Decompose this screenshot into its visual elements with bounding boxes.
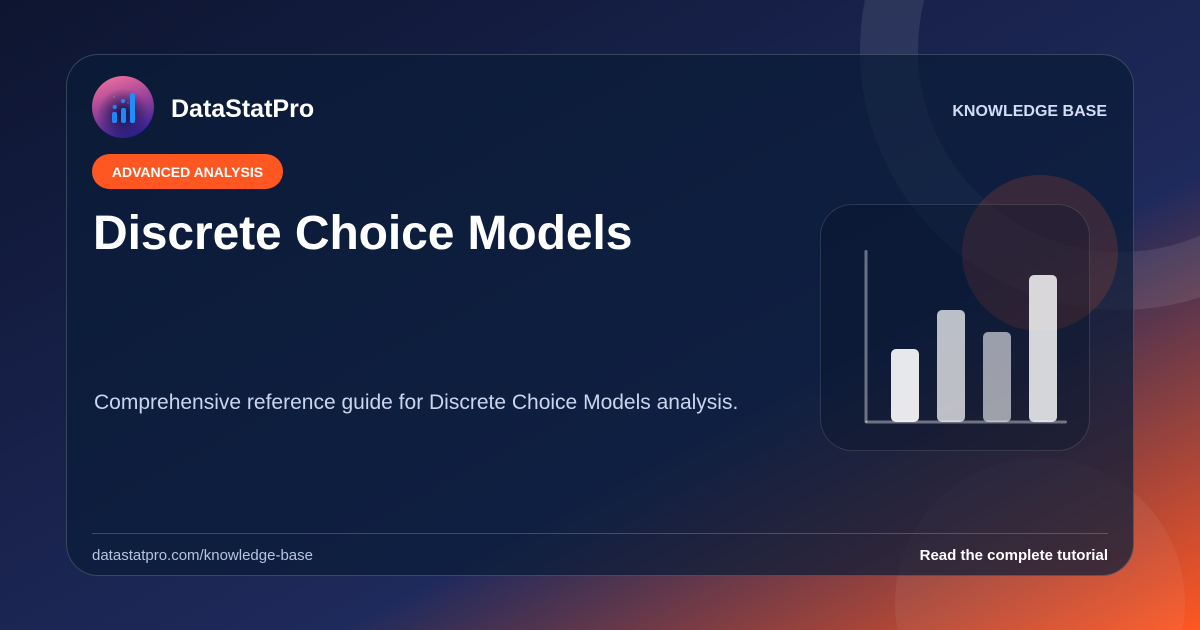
- decorative ring top right: [889, 0, 1200, 281]
- bar chart: [864, 250, 1067, 424]
- footer divider: [92, 533, 1108, 534]
- category pill: [92, 154, 283, 189]
- category pill: ADVANCED ANALYSIS: [112, 164, 263, 180]
- subtitle: Comprehensive reference guide for Discrete Choice Models analysis.: [94, 391, 738, 414]
- decorative circle bottom right: [895, 458, 1185, 630]
- accent circle: [962, 175, 1118, 331]
- main card: [66, 54, 1134, 576]
- chart panel: [820, 204, 1090, 451]
- brand name: DataStatPro: [171, 95, 314, 123]
- knowledge base label: KNOWLEDGE BASE: [952, 103, 1107, 120]
- footer url: datastatpro.com/knowledge-base: [92, 547, 313, 564]
- title: Discrete Choice Models: [93, 207, 632, 260]
- logo: [92, 76, 154, 138]
- footer call to action: Read the complete tutorial: [920, 547, 1108, 564]
